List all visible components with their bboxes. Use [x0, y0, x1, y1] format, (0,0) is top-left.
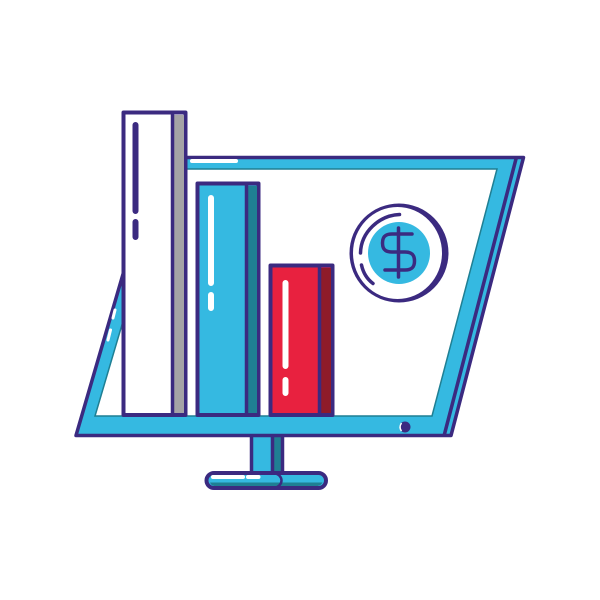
coin with dollar sign: [350, 204, 448, 302]
coin rim: [350, 204, 448, 302]
monitor stand: [206, 436, 326, 488]
stand neck: [252, 436, 282, 473]
frame outline: [76, 158, 524, 436]
bar: red: [270, 266, 332, 415]
frame bevel line: [444, 157, 516, 436]
screen: [95, 169, 497, 416]
dollar sign: [382, 228, 414, 277]
left frame highlight: [108, 310, 115, 340]
stand base: [206, 473, 326, 488]
power button: [400, 422, 410, 432]
bar: blue: [198, 184, 258, 415]
coin shine arcs: [360, 214, 400, 284]
screen highlight: [192, 159, 236, 163]
bar: white: [124, 112, 186, 415]
coin centre: [368, 222, 430, 284]
monitor frame: [75, 156, 524, 437]
